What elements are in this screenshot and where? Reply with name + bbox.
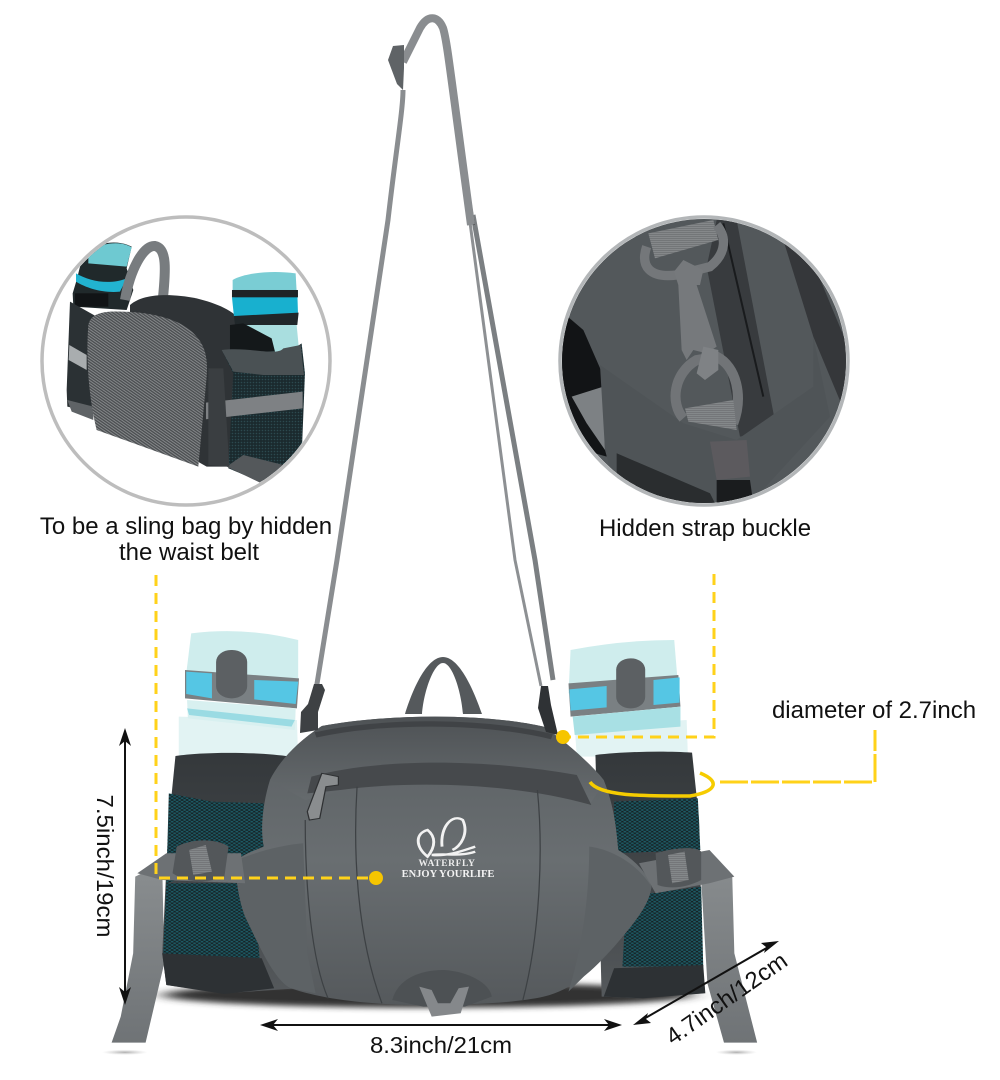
bag logo text: WATERFLY [418, 859, 476, 869]
right strap buckle [639, 848, 734, 893]
front zipper band [307, 763, 591, 805]
strap end shadows [102, 1050, 757, 1055]
front body [236, 717, 651, 1005]
label: strap buckle: Hidden strap buckle [599, 515, 811, 542]
shoulder strap and hook [316, 18, 553, 690]
left clip [300, 684, 325, 733]
yellow callout: sling bag [156, 575, 383, 885]
webbing on left [572, 387, 605, 450]
label: height: 7.5inch/19cm [92, 794, 118, 938]
label: diameter: diameter of 2.7inch [772, 697, 976, 724]
butterfly logo [418, 818, 475, 857]
side pocket [222, 343, 305, 483]
left bottle pocket [162, 753, 299, 994]
bottom dark edge [617, 453, 717, 507]
yellow callout: buckle [556, 574, 714, 744]
left hanging strap [112, 863, 164, 1043]
swivel ring [645, 225, 723, 276]
arrow: height [119, 728, 131, 1005]
side webbing strap [206, 392, 303, 419]
bottom tab [392, 970, 492, 1017]
right clip [538, 686, 558, 735]
mesh back pad [87, 312, 207, 467]
right hanging strap [697, 850, 757, 1043]
top zipper line [316, 724, 552, 737]
right bottle pocket [595, 752, 705, 998]
main bag [102, 631, 757, 1055]
arrow: width [260, 1019, 622, 1031]
yellow callout: diameter [590, 730, 875, 796]
fabric left dark pocket [560, 310, 607, 457]
label: depth: 4.7inch/12cm [661, 947, 792, 1050]
front bottle [230, 272, 299, 352]
circle inset: sling bag back view [42, 217, 330, 505]
label: sling bag line 2: the waist belt [119, 539, 259, 566]
label: sling bag: To be a sling bag by hidden [40, 513, 332, 540]
bag logo text: ENJOY YOURLIFE [402, 869, 494, 880]
zipper pull [307, 773, 338, 820]
circle inset: swivel buckle closeup [560, 217, 848, 507]
top flap [270, 717, 604, 805]
rear pocket [67, 302, 97, 420]
center loop [710, 440, 750, 480]
snap hook [674, 260, 717, 360]
top webbing [648, 220, 718, 258]
arrow: depth [633, 941, 779, 1025]
left bottle [179, 631, 299, 760]
seams [305, 787, 540, 1003]
right bottle [568, 640, 688, 757]
small loop [208, 368, 229, 467]
front pocket fold [600, 368, 776, 503]
wing shading [236, 843, 651, 993]
bag logo text [402, 859, 494, 880]
bag body [130, 295, 243, 467]
zipper band [707, 220, 777, 437]
ground shadow [162, 982, 693, 1008]
rear bottle [73, 242, 133, 310]
lower D ring [676, 357, 738, 423]
lower webbing [685, 400, 737, 430]
top carry handle [405, 657, 482, 714]
handle [125, 246, 165, 310]
left strap buckle [137, 840, 245, 883]
label: width: 8.3inch/21cm [370, 1032, 512, 1058]
